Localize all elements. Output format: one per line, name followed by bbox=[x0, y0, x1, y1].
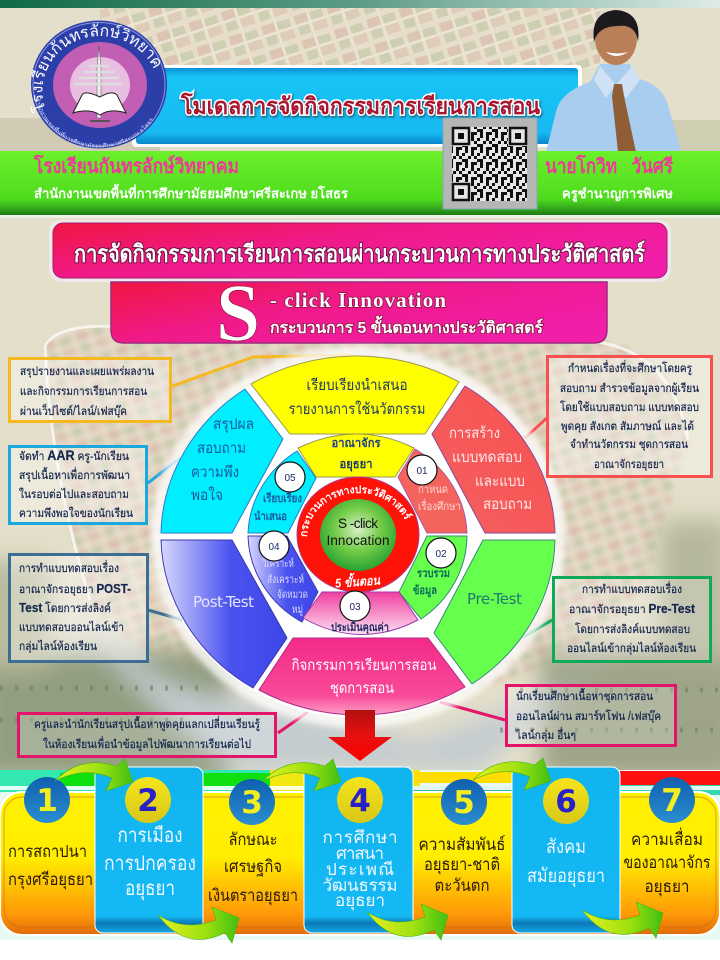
callout: publish results bbox=[10, 358, 170, 422]
outer segment: cyan bbox=[161, 389, 283, 533]
arrow: bottom green arrows bbox=[158, 902, 663, 943]
outer segment: red bbox=[432, 386, 555, 533]
step 1 bbox=[8, 777, 93, 890]
inner segment 04: สังเคราะห์ bbox=[267, 573, 304, 586]
arrow: top green arrows bbox=[55, 758, 551, 791]
outer segment: green pre-test bbox=[434, 540, 555, 684]
inner segment 05: เรียบเรียง bbox=[263, 492, 302, 505]
badge 02 bbox=[426, 538, 456, 568]
step 2: การเมือง bbox=[118, 825, 182, 847]
step 1: การสถาปนา bbox=[8, 842, 87, 861]
step 4: อยุธยา bbox=[335, 891, 385, 911]
callout: class discussion bbox=[18, 714, 276, 756]
big S: S bbox=[216, 267, 260, 358]
school logo bbox=[30, 20, 167, 148]
callout: publish results: สรุปรายงานและเผยแพร่ผลงาน bbox=[20, 366, 154, 378]
callout: publish results: และกิจกรรมการเรียนการสอน bbox=[20, 385, 147, 398]
step 4 bbox=[322, 777, 398, 911]
step 7: ความเสื่อม bbox=[631, 827, 703, 849]
outer segment: blue post-test bbox=[161, 540, 287, 688]
step panel 6 bbox=[512, 767, 620, 933]
callout: post-test: การทำแบบทดสอบเรื่อง bbox=[19, 560, 119, 575]
badge 03 bbox=[340, 591, 370, 621]
outer segment: pink bottom: กิจกรรมการเรียนการสอน bbox=[292, 657, 436, 674]
step 2: อยุธยา bbox=[125, 878, 175, 901]
callout: post-test bbox=[10, 554, 148, 662]
inner segment 04 bbox=[248, 536, 318, 622]
inner segment 04: หมู่ bbox=[292, 604, 303, 616]
callout: publish results: ผ่านเว็ปไซต์/ไลน์/เฟสบุ๊ค bbox=[20, 403, 127, 418]
outer segment: red: การสร้าง bbox=[449, 425, 500, 442]
step 1: 1 bbox=[36, 783, 58, 819]
callout: define topic: กำหนดเรื่องที่จะศึกษาโดยครู bbox=[568, 360, 692, 375]
inner segment 01 bbox=[398, 449, 467, 533]
inner segment 01: กำหนด bbox=[418, 484, 448, 496]
callout: define topic: จำทำนวัตกรรม ชุดการสอน bbox=[570, 438, 688, 451]
outer segment: pink bottom: ชุดการสอน bbox=[330, 680, 394, 698]
callout: AAR bbox=[10, 446, 146, 524]
callout: pre-test: ออนไลน์เข้ากลุ่มไลน์ห้องเรียน bbox=[567, 641, 696, 655]
outer segment: green pre-test: Pre-Test bbox=[467, 590, 522, 608]
school name: โรงเรียนกันทรลักษ์วิทยาคม bbox=[33, 154, 239, 178]
header banner: blue title band bbox=[132, 65, 582, 147]
center red ring bbox=[296, 476, 420, 592]
sub heading line 2: กระบวนการ 5 ขั้นตอนทางประวัติศาสตร์ bbox=[270, 315, 543, 337]
callout: AAR: สรุปเนื้อหาเพื่อการพัฒนา bbox=[19, 467, 130, 482]
teacher name: นายโกวิท วันศรี bbox=[545, 154, 673, 178]
inner segment 02: รวบรวม bbox=[417, 568, 450, 580]
teacher title: ครูชำนาญการพิเศษ bbox=[562, 186, 673, 202]
inner segment 04: จัดหมวด bbox=[277, 589, 308, 601]
outer segment: red: สอบถาม bbox=[483, 496, 532, 513]
step 3: ลักษณะ bbox=[228, 830, 278, 849]
step 5: 5 bbox=[453, 785, 475, 821]
callout: post-test: Test โดยการส่งลิงค์ bbox=[19, 600, 111, 615]
callout: pre-test: อาณาจักรอยุธยา Pre-Test bbox=[569, 601, 696, 616]
step 4: 4 bbox=[349, 783, 371, 819]
inner segment 04: วิเคราะห์ bbox=[261, 557, 294, 570]
callout: pre-test: โดยการส่งลิงค์แบบทดสอบ bbox=[575, 622, 690, 636]
step 6: สมัยอยุธยา bbox=[527, 866, 605, 888]
badge 04 bbox=[259, 531, 289, 561]
step 1: กรุงศรีอยุธยา bbox=[8, 870, 93, 890]
inner segment 05 bbox=[248, 451, 316, 533]
center green circle: S -click bbox=[338, 516, 378, 531]
step 7 bbox=[624, 777, 710, 897]
step 3: เงินตราอยุธยา bbox=[208, 886, 298, 906]
sub heading line 1: - click Innovation bbox=[270, 288, 446, 312]
inner segment: yellow kingdom: อาณาจักร bbox=[332, 436, 381, 450]
inner segment 02: ข้อมูล bbox=[413, 584, 437, 598]
sub heading panel bbox=[111, 267, 607, 358]
school office: สำนักงานเขตพื้นที่การศึกษามัธยมศึกษาศรีสะเกษ ยโสธร bbox=[34, 183, 348, 201]
step panel 2 bbox=[95, 767, 203, 933]
callout: define topic bbox=[548, 356, 712, 476]
bottom timeline band bbox=[0, 767, 720, 940]
step 2: 2 bbox=[137, 783, 159, 819]
badge 01: 01 bbox=[416, 466, 428, 477]
outer segment: top yellow: เรียบเรียงนำเสนอ bbox=[306, 377, 408, 394]
callout: class discussion: ครูและนำนักเรียนสรุปเนื้อหาพูดคุยแลกเปลี่ยนเรียนรู้ bbox=[34, 716, 260, 731]
outer segment: cyan: สรุปผล bbox=[213, 416, 254, 434]
step 4: ศาสนา bbox=[336, 844, 384, 863]
outer segment: top yellow bbox=[251, 356, 459, 434]
center red ring: 5 ขั้นตอน bbox=[334, 570, 382, 591]
badge 02: 02 bbox=[435, 549, 447, 560]
callout: post-test: อาณาจักรอยุธยา POST- bbox=[19, 581, 131, 596]
step 2 bbox=[104, 777, 196, 901]
callout: online study: นักเรียนศึกษาเนื้อหาชุดการสอน bbox=[516, 688, 653, 703]
badge 04: 04 bbox=[268, 542, 280, 553]
step 5: ความสัมพันธ์ bbox=[418, 835, 506, 854]
outer segment: red: แบบทดสอบ bbox=[452, 449, 522, 466]
callout: define topic: อาณาจักรอยุธยา bbox=[594, 459, 664, 471]
step 6: สังคม bbox=[546, 837, 586, 858]
inner segment 05: นำเสนอ bbox=[254, 509, 287, 523]
yellow rounded box bbox=[0, 792, 720, 935]
main heading bar bbox=[49, 220, 671, 282]
callout: define topic: สอบถาม สำรวจข้อมูลจากผู้เรียน bbox=[560, 382, 699, 395]
badge 05: 05 bbox=[284, 473, 296, 484]
badge 03: 03 bbox=[349, 602, 361, 613]
outer segment: blue post-test: Post-Test bbox=[193, 593, 254, 611]
step 4: วัฒนธรรม bbox=[323, 876, 398, 895]
inner segment 03 bbox=[303, 592, 418, 635]
step 6: 6 bbox=[555, 784, 577, 820]
callout: online study: ออนไลน์ผ่าน สมาร์ทโฟน /เฟสบุ๊ค bbox=[516, 709, 661, 723]
step badges bbox=[259, 455, 456, 621]
outer segment: cyan: ความพึง bbox=[191, 464, 239, 481]
step 5: อยุธยา-ชาติ bbox=[424, 855, 500, 875]
callout: pre-test: การทำแบบทดสอบเรื่อง bbox=[582, 581, 682, 596]
outer segment: top yellow: รายงานการใช้นวัตกรรม bbox=[288, 400, 426, 418]
logo emblem: stupa and book bbox=[73, 46, 126, 121]
callout: pre-test bbox=[554, 578, 710, 662]
outer segment: cyan: พอใจ bbox=[191, 486, 223, 504]
callout: define topic: พูดคุย สังเกต สัมภาษณ์ และได้ bbox=[561, 419, 694, 433]
top gradient strip bbox=[0, 0, 720, 8]
center red ring: กระบวนการทางประวัติศาสตร์ bbox=[301, 485, 414, 536]
callout: define topic: โดยใช้แบบสอบถาม แบบทดสอบ bbox=[560, 400, 699, 414]
center green circle: Innocation bbox=[326, 533, 390, 548]
step 3: เศรษฐกิจ bbox=[224, 857, 282, 877]
outer segment: cyan: สอบถาม bbox=[197, 440, 246, 457]
inner segment: yellow kingdom bbox=[298, 434, 414, 477]
step 5: ตะวันตก bbox=[434, 876, 490, 895]
callout: AAR: ความพึงพอใจของนักเรียน bbox=[19, 507, 133, 520]
outer segment: pink bottom bbox=[259, 638, 465, 715]
header title: โมเดลการจัดกิจกรรมการเรียนการสอน bbox=[180, 92, 540, 119]
inner segment 01: เรื่องศึกษา bbox=[418, 498, 461, 513]
step 2: การปกครอง bbox=[104, 853, 196, 875]
step panel 4 bbox=[304, 767, 413, 933]
inner segment: yellow kingdom: อยุธยา bbox=[340, 457, 372, 472]
inner segment 03: ประเมินคุณค่า bbox=[331, 621, 389, 635]
callout: AAR: ในรอบต่อไปและสอบถาม bbox=[19, 488, 129, 501]
callout: post-test: กลุ่มไลน์ห้องเรียน bbox=[19, 639, 97, 653]
circular process diagram bbox=[148, 342, 568, 730]
badge 01 bbox=[407, 455, 437, 485]
step 4: การศึกษา bbox=[322, 828, 398, 847]
step 7: 7 bbox=[661, 783, 683, 819]
connector lines bbox=[148, 355, 552, 733]
callout: online study: ไลน์กลุ่ม อื่นๆ bbox=[515, 727, 576, 742]
step 3 bbox=[208, 779, 298, 906]
portrait of teacher bbox=[546, 10, 681, 152]
step 4: ประเพณี bbox=[326, 860, 394, 879]
callout: class discussion: ในห้องเรียนเพื่อนำข้อมูลไปพัฒนาการเรียนต่อไป bbox=[43, 736, 251, 751]
header green bar bbox=[0, 151, 720, 218]
inner segment 02 bbox=[399, 536, 467, 619]
center green circle bbox=[320, 499, 396, 571]
step 7: อยุธยา bbox=[644, 877, 690, 897]
outer segment: red: และแบบ bbox=[475, 473, 525, 490]
step 3: 3 bbox=[241, 785, 263, 821]
callout: AAR: จัดทำ AAR ครู-นักเรียน bbox=[19, 447, 129, 463]
step 5 bbox=[418, 779, 506, 895]
badge 05 bbox=[275, 462, 305, 492]
callout: post-test: แบบทดสอบออนไลน์เข้า bbox=[19, 620, 124, 634]
callout: online study bbox=[506, 686, 676, 746]
logo lower text: สำนักงานเขตพื้นที่การศึกษามัธยมศึกษาศรีสะเกษ ยโสธร bbox=[36, 98, 153, 148]
step 6 bbox=[527, 778, 605, 888]
QR code bbox=[443, 118, 537, 209]
arrow: red down arrow bbox=[328, 710, 392, 761]
